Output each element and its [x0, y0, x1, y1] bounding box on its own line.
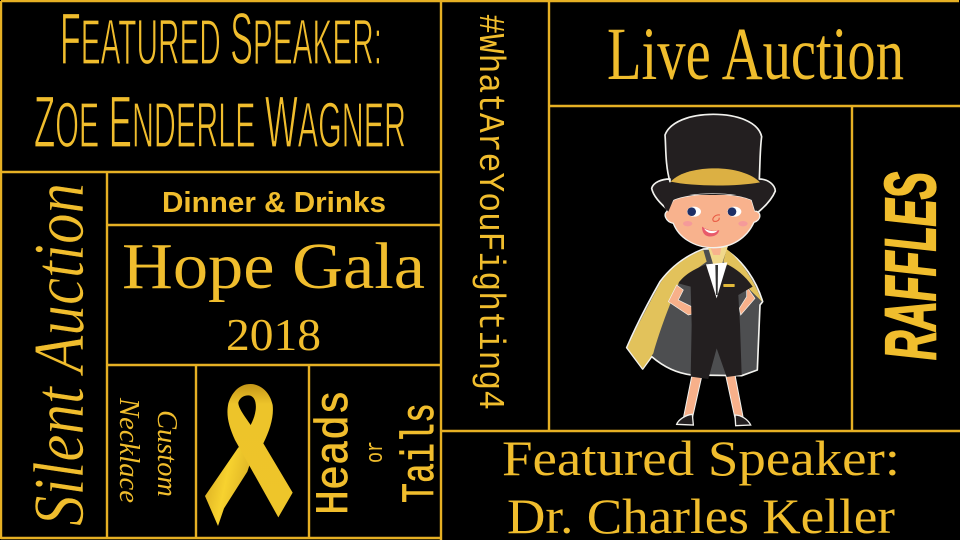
- shoes: [677, 414, 751, 426]
- heading: featured speaker Zoe Enderle Wagner: [34, 0, 406, 163]
- label: custom necklace: Necklace: [113, 397, 145, 503]
- label: silent auction: Silent Auction: [19, 183, 99, 526]
- title: Hope Gala: Hope Gala: [122, 230, 425, 303]
- eyes: [687, 207, 701, 217]
- illustration: boy in top hat and gold cape: [627, 114, 775, 426]
- heading: featured speaker Dr. Charles Keller: Featured Speaker:: [502, 430, 900, 486]
- nose: [713, 215, 720, 221]
- neck: [709, 245, 722, 255]
- label: dinner and drinks: Dinner & Drinks: [162, 187, 386, 219]
- label: heads or tails: or: [363, 441, 390, 463]
- label: heads or tails: Heads: [309, 390, 361, 515]
- legs: [683, 375, 743, 418]
- hat band: [671, 168, 760, 186]
- arms: [668, 285, 755, 315]
- heading: featured speaker Zoe Enderle Wagner: FEATURED SPEAKER:: [60, 0, 382, 80]
- hair: [660, 194, 767, 212]
- hat: [652, 114, 775, 213]
- face: [665, 194, 760, 248]
- label: heads or tails: [309, 390, 447, 515]
- label: custom necklace: [113, 397, 183, 503]
- suit: [678, 264, 753, 379]
- label: custom necklace: Custom: [151, 410, 183, 497]
- hashtag: WhatAreYouFighting4: #WhatAreYouFighting4: [469, 14, 510, 410]
- label: heads or tails: Tails: [395, 403, 447, 503]
- cheeks: [683, 221, 692, 226]
- year: 2018: 2018: [226, 309, 321, 360]
- heading: featured speaker Zoe Enderle Wagner: ZOE ENDERLE WAGNER: [34, 82, 406, 163]
- heading: featured speaker Dr. Charles Keller: [502, 430, 900, 540]
- white outline cape and gold cape: [627, 248, 763, 376]
- icon: yellow awareness ribbon: [205, 384, 293, 526]
- mouth: [702, 227, 719, 236]
- label: raffles: RAFFLES: [872, 172, 951, 360]
